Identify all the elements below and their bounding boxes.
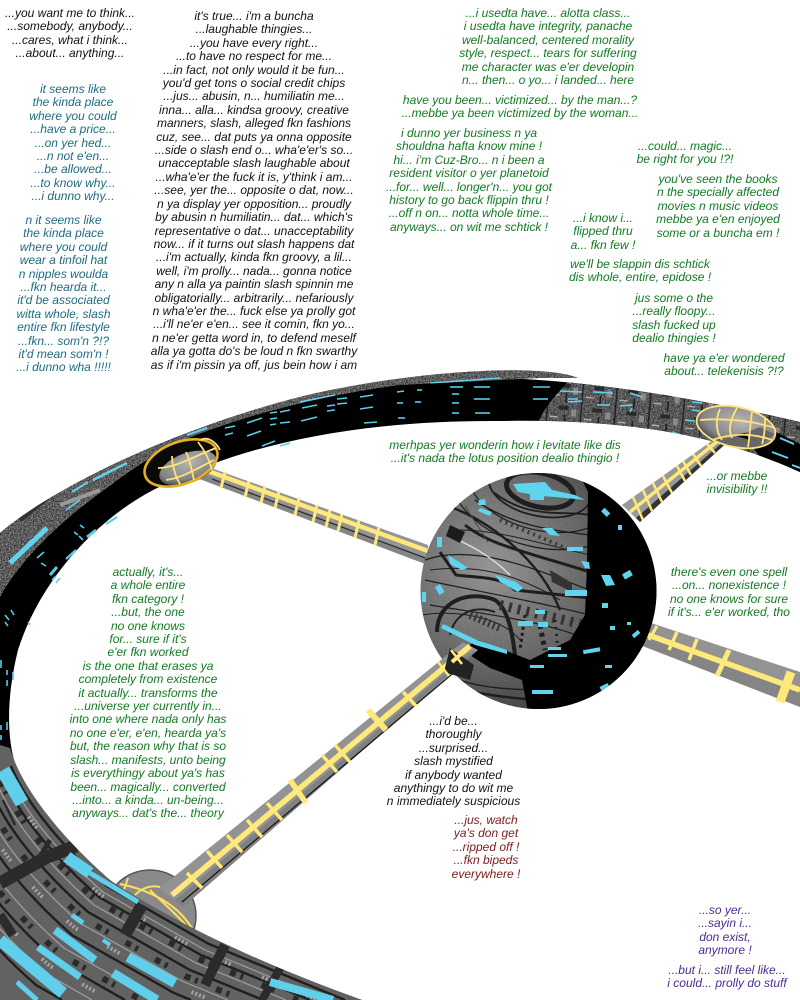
text: n it seems like: ...fkn... som'n ?!? [18, 334, 109, 348]
text: it's true: you'd get tons o social credit chips [163, 76, 345, 90]
illustration: orbital ring station [0, 370, 800, 1000]
text: i dunno yer business: ...for... well... longer'n... you got [386, 180, 552, 194]
text: actually a whole category: completely from existence [79, 672, 217, 686]
text: or mebbe invisibility: invisibility !! [707, 482, 767, 496]
text: i dunno yer business: anyways... on wit me schtick ! [390, 220, 548, 234]
text: it's true: ...to have no respect for me... [176, 49, 332, 63]
text: i'd be surprised: if anybody wanted [405, 768, 502, 782]
text: it seems like: ...be allowed... [34, 162, 112, 176]
text: i usedta have: n... then... o yo... i landed... here [462, 73, 634, 87]
text: it's true: ...side o slash end o... wha'e'er's so... [155, 143, 353, 157]
text: it's true: well, i'm prolly... nada... gonna notice [156, 264, 352, 278]
text: actually a whole category: no one knows [111, 619, 185, 633]
ring: base [0, 370, 800, 1000]
sphere: cyan windows [422, 482, 640, 694]
text: i dunno yer business: history to go back flippin thru ! [389, 193, 549, 207]
text: it's true: unacceptable slash laughable about [158, 156, 350, 170]
text: so yer sayin: ...sayin i... [698, 916, 752, 930]
text: it seems like: ...to know why... [30, 176, 116, 190]
text: i usedta have: style, respect... tears for suffering [459, 46, 637, 60]
text: but i still feel like: ...but i... still feel like... [668, 963, 786, 977]
text: merhpas [389, 438, 621, 465]
ring: upper-right panelled section [539, 382, 800, 472]
text: you've seen the books: you've seen the books [658, 172, 778, 186]
text: actually a whole category: ...but, the one [111, 605, 185, 619]
text: i dunno yer business: resident visitor o yer planetoid [389, 166, 549, 180]
text: it's true: n wha'e'er the... fuck else ya prolly got [153, 304, 355, 318]
text: telekenisis: about... telekenisis ?!? [664, 364, 784, 378]
text: actually a whole category: a whole entire [111, 578, 185, 592]
ring: upper-left textured rim [0, 370, 600, 600]
text: you've seen the books: some or a buncha em ! [657, 226, 779, 240]
text: it's true: n ne'er getta word in, to defend meself [152, 331, 356, 345]
text: nonexistence spell: if it's... e'er worked, tho [668, 605, 790, 619]
text: i'd be surprised: anythingy to do wit me [394, 781, 513, 795]
text: n it seems like: the kinda place [23, 226, 104, 240]
text: it seems like: it seems like [40, 82, 106, 96]
text: so yer sayin: anymore ! [698, 943, 752, 957]
text: so yer sayin: don exist, [699, 930, 751, 944]
text: n it seems like: where you could [20, 240, 107, 254]
text: it's true: obligatorially... arbitrarily... nefariously [155, 291, 353, 305]
text: jus watch: ...fkn bipeds [454, 853, 518, 867]
text: it's true: ...see, yer the... opposite o dat, now... [154, 183, 354, 197]
text: merhpas: ...it's nada the lotus position dealio thingio ! [391, 451, 619, 465]
text: nonexistence spell: no one knows for sure [670, 592, 788, 606]
text: jus some o the: dealio thingies ! [632, 331, 716, 345]
text: but i still feel like: i could... prolly do stuff [667, 976, 787, 990]
text: actually a whole category: e'er fkn worked [108, 645, 188, 659]
text: i'd be surprised: n immediately suspicious [387, 794, 520, 808]
text: actually a whole category: into one where nada only has [70, 712, 226, 726]
text: i'd be surprised: thoroughly [425, 727, 482, 741]
text: it's true: n ya display yer opposition... proudly [157, 197, 351, 211]
text: jus some o the: jus some o the [635, 291, 713, 305]
text: it's true: by abusin n humiliatin... dat... which's [155, 210, 353, 224]
text: jus some o the: ...really floopy... [632, 304, 716, 318]
text: it seems like: ...have a price... [30, 122, 116, 136]
text: so yer sayin [698, 903, 752, 957]
text: i'd be surprised: slash mystified [414, 754, 493, 768]
text: i usedta have: i usedta have integrity, panache [464, 19, 632, 33]
text: it's true: ...i'll ne'er e'en... see it comin, fkn yo... [153, 317, 355, 331]
text: i usedta have [459, 6, 637, 87]
text: n it seems like: n it seems like [25, 213, 102, 227]
text: telekenisis: have ya e'er wondered [663, 351, 785, 365]
text: it's true: cuz, see... dat puts ya onna opposite [156, 130, 352, 144]
text: n it seems like [16, 213, 111, 374]
text: or mebbe invisibility: ...or mebbe [707, 469, 767, 483]
text: have you been victimized: ...mebbe ya been victimized by the woman... [402, 106, 638, 120]
text: n it seems like: witta whole, slash [16, 307, 111, 321]
text: actually a whole category: fkn category ! [112, 592, 184, 606]
text: actually a whole category: is everythingy about ya's has [71, 766, 225, 780]
text: it seems like: ...i dunno why... [31, 189, 115, 203]
text: it's true: ...laughable thingies... [196, 22, 312, 36]
text: actually a whole category: no one e'er, e'en, hearda ya's [70, 726, 226, 740]
text: n it seems like: n nipples woulda [19, 267, 108, 281]
text: it's true: now... if it turns out slash happens dat [154, 237, 354, 251]
sphere: hull lines [422, 473, 628, 700]
text: actually a whole category: but, the reason why that is so [70, 739, 226, 753]
text: i dunno yer business: i dunno yer business n ya [401, 126, 537, 140]
text: i dunno yer business: hi... i'm Cuz-Bro... n i been a [393, 153, 545, 167]
text: it seems like: the kinda place [33, 95, 113, 109]
text: it's true: ...in fact, not only would it be fun... [163, 63, 345, 77]
text: or mebbe invisibility [706, 469, 768, 496]
text: could magic: be right for you !?! [637, 152, 733, 166]
spoke: lower-left, in front of sphere [160, 642, 478, 907]
text: could magic [636, 139, 734, 166]
text: actually a whole category: been... magically... converted [70, 780, 226, 794]
text: jus watch [452, 813, 520, 881]
text: actually a whole category: for... sure if it's [109, 632, 187, 646]
text: actually a whole category: ...universe yer currently in... [74, 699, 222, 713]
text: you want me to think: ...you want me to think... [5, 6, 135, 20]
ring: cyan window dashes on dark section [1, 387, 550, 740]
text: actually a whole category: is the one that erases ya [83, 659, 213, 673]
text: it seems like: ...n not e'en... [37, 149, 109, 163]
text: it's true: inna... alla... kindsa groovy, creative [159, 103, 349, 117]
text: could magic: ...could... magic... [638, 139, 732, 153]
sphere: central core [420, 473, 656, 709]
text: telekenisis [663, 351, 785, 378]
text: i dunno yer business: shouldna hafta know mine ! [396, 139, 542, 153]
text: jus some o the: slash fucked up [632, 318, 716, 332]
text: jus watch: ya's don get [454, 826, 518, 840]
text: have you been victimized: have you been... victimized... by the man...? [403, 93, 637, 107]
text: jus watch: ...jus, watch [454, 813, 518, 827]
text: i know i flipped: ...i know i... [573, 211, 633, 225]
hub: upper-left [138, 430, 224, 496]
text: n it seems like: wear a tinfoil hat [20, 253, 107, 267]
text: you've seen the books: mebbe ya e'en enjoyed [656, 212, 780, 226]
text: it's true: ...wha'e'er the fuck it is, y'think i am... [156, 170, 352, 184]
text: slappin dis schtick: we'll be slappin dis schtick [570, 257, 710, 271]
sphere: shadow side [553, 470, 660, 712]
text: so yer sayin: ...so yer... [699, 903, 751, 917]
text: it seems like: ...on yer hed... [35, 136, 111, 150]
text: but i still feel like [667, 963, 788, 990]
text: i'd be surprised: ...surprised... [419, 741, 488, 755]
text: nonexistence spell [668, 565, 790, 619]
text: i dunno yer business: ...off n on... notta whole time... [389, 206, 549, 220]
text: i usedta have: me character was e'er developin [462, 60, 634, 74]
text: actually a whole category [70, 565, 226, 820]
text: n it seems like: ...fkn hearda it... [20, 280, 107, 294]
text: you've seen the books: n the specially affected [657, 185, 779, 199]
text: i dunno yer business [386, 126, 552, 234]
spoke: upper-left [197, 463, 428, 565]
text: it's true: ...jus... abusin, n... humiliatin me... [163, 89, 345, 103]
text: you want me to think: ...somebody, anybody... [7, 19, 133, 33]
text: i know i flipped [570, 211, 636, 252]
text: have you been victimized [402, 93, 638, 120]
text: merhpas: merhpas yer wonderin how i levitate like dis [389, 438, 621, 452]
text: it seems like: where you could [29, 109, 117, 123]
text: it's true: any n alla ya paintin slash spinnin me [155, 277, 353, 291]
text: n it seems like: it'd mean som'n ! [19, 347, 108, 361]
text: i know i flipped: flipped thru [573, 224, 633, 238]
text: it's true: as if i'm pissin ya off, jus bein how i am [151, 358, 357, 372]
text: nonexistence spell: ...on... nonexistence ! [672, 578, 786, 592]
text: i know i flipped: a... fkn few ! [571, 238, 635, 252]
text: actually a whole category: slash... manifests, unto being [70, 753, 226, 767]
text: it's true [151, 9, 358, 372]
spoke: upper-right [622, 430, 733, 522]
text: jus watch: everywhere ! [452, 867, 520, 881]
text: nonexistence spell: there's even one spell [671, 565, 787, 579]
text: it's true: it's true... i'm a buncha [194, 9, 314, 23]
text: actually a whole category: actually, it's... [113, 565, 183, 579]
text: it's true: ...you have every right... [190, 36, 318, 50]
text: i'd be surprised: ...i'd be... [429, 714, 478, 728]
text: you want me to think: ...about... anything... [16, 46, 124, 60]
text: slappin dis schtick [569, 257, 711, 284]
text: slappin dis schtick: dis whole, entire, epidose ! [569, 270, 711, 284]
text: n it seems like: ...i dunno wha !!!!! [16, 360, 111, 374]
text: actually a whole category: ...into... a kinda... un-being... [72, 793, 224, 807]
spoke: lower-right [640, 622, 800, 707]
text: it's true: manners, slash, alleged fkn fashions [157, 116, 351, 130]
text: it seems like [29, 82, 117, 203]
text: you've seen the books [656, 172, 780, 240]
text: n it seems like: entire fkn lifestyle [17, 320, 110, 334]
lower-left hub behind the ring [104, 870, 196, 962]
text: it's true: ...i'm actually, kinda fkn groovy, a lil... [156, 250, 352, 264]
text: actually a whole category: anyways... dat's the... theory [72, 806, 224, 820]
text: you want me to think [5, 6, 135, 60]
text: n it seems like: it'd be associated [17, 293, 110, 307]
text: actually a whole category: it actually... transforms the [78, 686, 218, 700]
text: i'd be surprised [387, 714, 520, 808]
text: i usedta have: well-balanced, centered morality [462, 33, 634, 47]
text: i usedta have: ...i usedta have... alotta class... [466, 6, 630, 20]
hub: upper-right [693, 399, 779, 455]
text: you want me to think: ...cares, what i think... [12, 33, 128, 47]
text: jus some o the [632, 291, 716, 345]
text: it's true: alla ya gotta do's be loud n fkn swarthy [151, 344, 357, 358]
text: you've seen the books: movies n music videos [658, 199, 778, 213]
text: jus watch: ...ripped off ! [453, 840, 519, 854]
ring: lower-left machinery [0, 740, 365, 1000]
text: it's true: representative o dat... unacceptability [155, 224, 353, 238]
